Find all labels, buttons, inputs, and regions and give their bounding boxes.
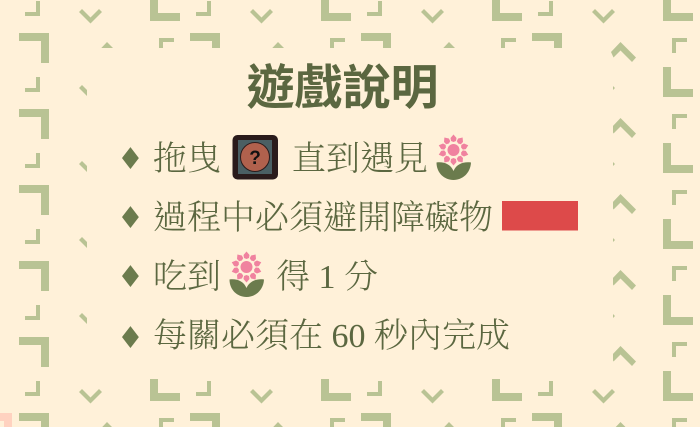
panel: instructions — [87, 48, 613, 379]
icon: flower — [230, 252, 264, 297]
icon: red obstacle — [502, 201, 578, 230]
icon: question box: ? — [249, 148, 261, 169]
icon: question box — [232, 135, 278, 180]
text: score: 得 1 分 — [276, 259, 378, 296]
title: 遊戲說明 — [246, 62, 439, 115]
bullet 3: ♦ — [117, 260, 144, 295]
icon: flower — [436, 134, 471, 180]
text: drag: 拖曳 — [153, 140, 221, 178]
bullet 1: ♦ — [117, 142, 144, 177]
instruction line 2 — [117, 199, 578, 237]
bullet 4: ♦ — [117, 321, 144, 356]
bullet 2: ♦ — [117, 201, 144, 236]
text: until reaching: 直到遇見 — [292, 140, 428, 178]
instruction line 1 — [117, 134, 471, 180]
text: time limit: 每關必須在 60 秒內完成 — [153, 317, 510, 355]
text: eat: 吃到 — [153, 258, 221, 296]
text: avoid obstacles: 過程中必須避開障礙物 — [153, 199, 493, 237]
instruction line 4 — [117, 317, 510, 356]
instruction line 3 — [117, 252, 378, 297]
